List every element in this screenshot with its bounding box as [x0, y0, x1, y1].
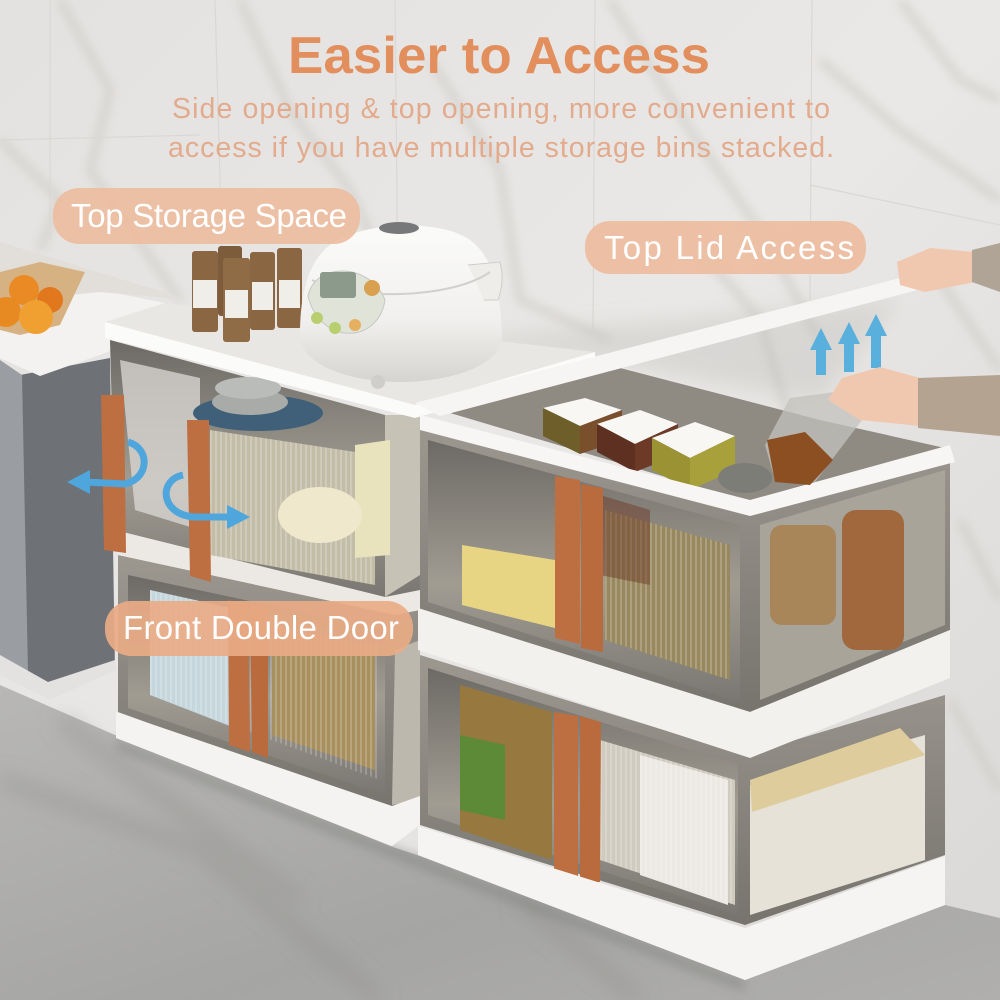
- fruit bag: [0, 262, 85, 335]
- stacked plates: [193, 377, 362, 543]
- label: top storage space: Top Storage Space: [71, 197, 347, 234]
- right stack: upper bin: [420, 425, 950, 712]
- left stack: lower bin: [118, 555, 420, 812]
- arrows: lid lifting: [810, 314, 887, 375]
- hand holding jar: [765, 367, 1000, 485]
- left stack: upper door handles: [101, 395, 211, 582]
- left storage stack: [67, 303, 595, 846]
- left stack: white top lid: [105, 303, 595, 418]
- left stack: lower door handles: [228, 600, 268, 758]
- right stack: white base: [418, 826, 945, 980]
- label: top storage space: [53, 188, 360, 244]
- right stack: lower door handles: [554, 712, 601, 882]
- right stack: upper rim: [420, 415, 955, 516]
- label: top lid access: [585, 221, 866, 274]
- rice cooker: [300, 222, 502, 389]
- spice jars: [192, 246, 302, 342]
- right stack: upper door handles: [555, 476, 603, 652]
- kitchen counter and cabinet: [0, 242, 190, 700]
- right storage stack: [415, 278, 955, 980]
- right stack: inner back wall: [440, 368, 945, 502]
- arrow: door opening right: [166, 475, 250, 529]
- label: front double door: Front Double Door: [123, 609, 399, 646]
- right stack: lifted lid: [415, 278, 925, 416]
- arrow: door opening left: [67, 442, 144, 494]
- label: front double door: [105, 601, 413, 656]
- right stack: lower bin: [420, 655, 945, 925]
- left stack: white divider: [118, 520, 420, 615]
- label: top lid access: Top Lid Access: [604, 229, 854, 266]
- subtitle: access if you have multiple storage bins stacked.: [168, 132, 834, 164]
- left stack: white base: [116, 712, 420, 846]
- hand lifting lid: [897, 243, 1000, 292]
- subtitle: [168, 93, 834, 164]
- right stack: food containers: [543, 398, 772, 493]
- left stack: upper bin: [110, 340, 420, 597]
- floor: [0, 685, 1000, 1000]
- title: Easier to Access: [288, 27, 710, 85]
- right stack: white divider: [418, 608, 950, 758]
- subtitle: Side opening & top opening, more convenient to: [172, 93, 830, 125]
